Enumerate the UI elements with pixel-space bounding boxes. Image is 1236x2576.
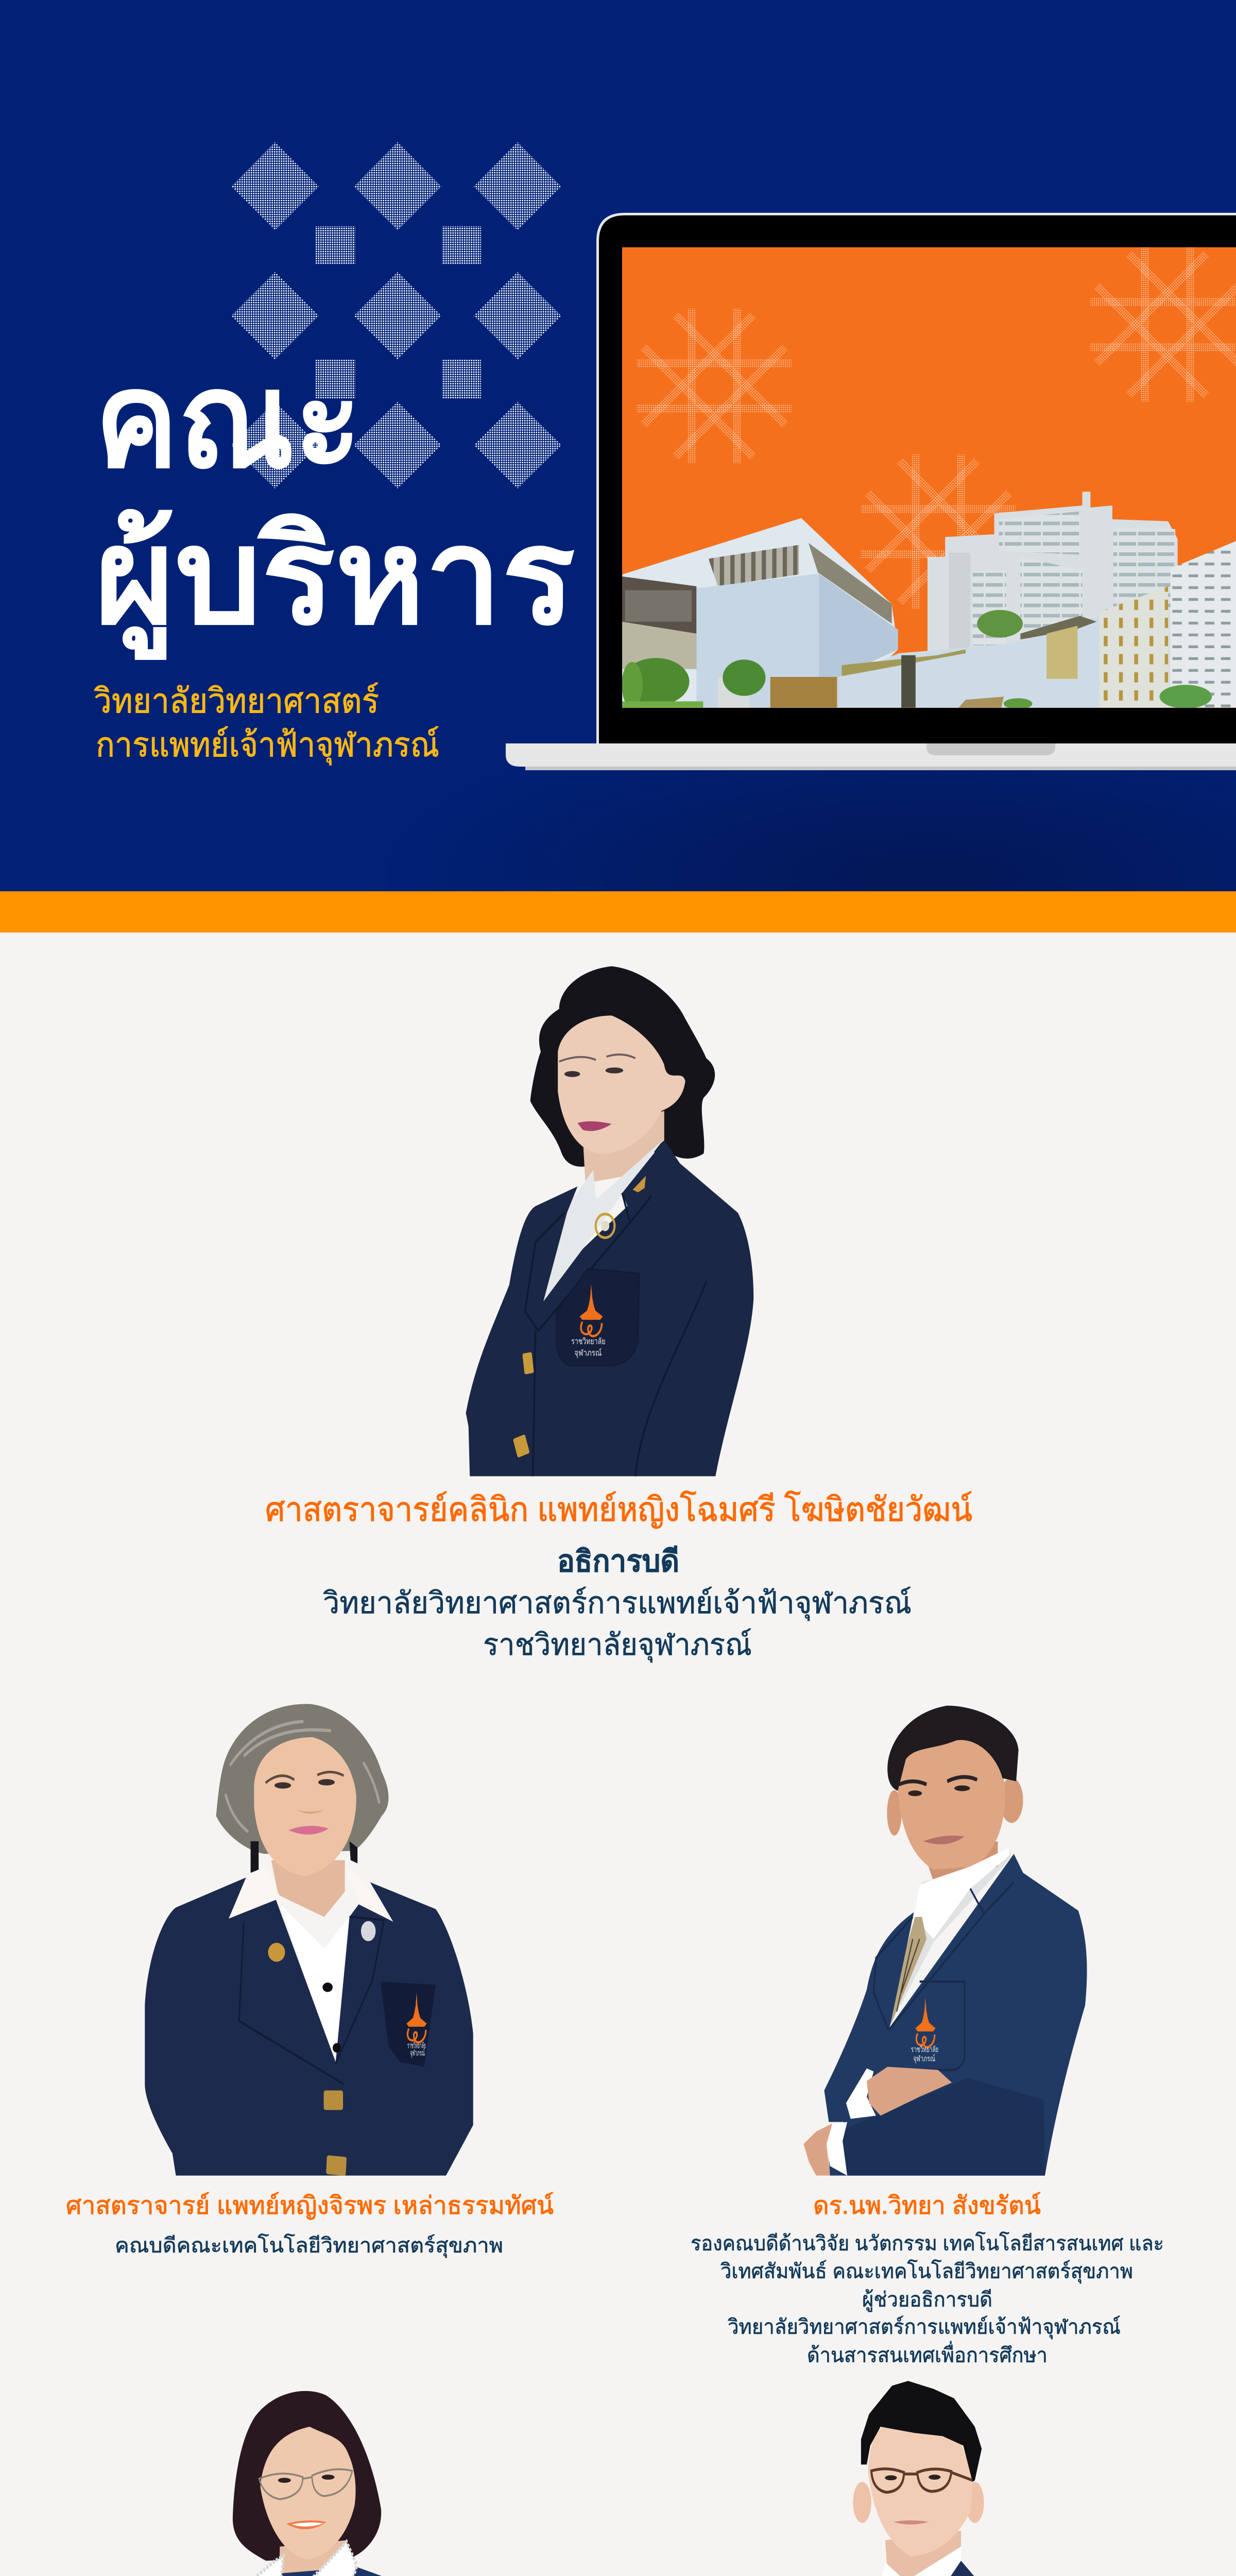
portrait: faculty dean: จุฬาภรณ์ <box>410 2048 425 2058</box>
name block: faculty dean <box>66 2192 554 2258</box>
portrait: dean of college: จุฬาภรณ์ <box>574 1348 602 1359</box>
name block: research: ด้านสารสนเทศเพื่อการศึกษา <box>807 2341 1048 2367</box>
name block: faculty dean: คณบดีคณะเทคโนโลยีวิทยาศาสตร์สุขภาพ <box>115 2234 503 2258</box>
name block: dean <box>265 1490 972 1663</box>
portrait: faculty dean: ราชวิทยาลัย <box>407 2041 426 2050</box>
name block: research: วิทยาลัยวิทยาศาสตร์การแพทย์เจ้าฟ้าจุฬาภรณ์ <box>728 2315 1121 2340</box>
diamond and square pattern <box>231 142 561 488</box>
name block: dean: ศาสตราจารย์คลินิก แพทย์หญิงโฉมศรี โฆษิตชัยวัฒน์ <box>265 1490 972 1529</box>
title: ผู้บริหาร <box>95 502 575 660</box>
title: คณะ <box>95 346 362 495</box>
portrait: assistant president research: ราชวิทยาลัย <box>911 2044 938 2054</box>
name block: research: ดร.นพ.วิทยา สังขรัตน์ <box>813 2192 1041 2219</box>
subtitle: การแพทย์เจ้าฟ้าจุฬาภรณ์ <box>96 725 439 766</box>
name block: research: วิเทศสัมพันธ์ คณะเทคโนโลยีวิทยาศาสตร์สุขภาพ <box>720 2260 1133 2284</box>
laptop screen <box>605 215 1236 709</box>
laptop <box>506 213 1236 770</box>
subtitle <box>94 682 439 766</box>
portrait: faculty dean <box>145 1704 473 2176</box>
portrait: assistant president general education <box>159 2391 466 2576</box>
name block: dean: ราชวิทยาลัยจุฬาภรณ์ <box>483 1628 752 1663</box>
name block: dean: อธิการบดี <box>557 1545 679 1578</box>
portrait: assistant president research: จุฬาภรณ์ <box>913 2054 935 2064</box>
portrait: dean of college <box>466 967 753 1476</box>
orange band <box>0 891 1236 933</box>
name block: dean: วิทยาลัยวิทยาศาสตร์การแพทย์เจ้าฟ้าจุฬาภรณ์ <box>323 1586 912 1621</box>
laptop base <box>506 743 1236 770</box>
hero panel <box>0 0 1236 891</box>
name block: research <box>691 2192 1164 2367</box>
name block: research: รองคณบดีด้านวิจัย นวัตกรรม เทคโนโลยีสารสนเทศ และ <box>691 2232 1164 2255</box>
name block: faculty dean: ศาสตราจารย์ แพทย์หญิงจิรพร เหล่าธรรมทัศน์ <box>66 2192 554 2219</box>
portrait: dean of college: ราชวิทยาลัย <box>571 1337 606 1346</box>
title <box>95 346 575 660</box>
portrait: assistant president research <box>803 1706 1087 2176</box>
campus buildings illustration <box>622 492 1236 709</box>
name block: research: ผู้ช่วยอธิการบดี <box>862 2289 992 2312</box>
screen star motifs <box>605 215 1236 641</box>
portrait: assistant president quality <box>792 2381 1072 2576</box>
subtitle: วิทยาลัยวิทยาศาสตร์ <box>94 682 379 720</box>
